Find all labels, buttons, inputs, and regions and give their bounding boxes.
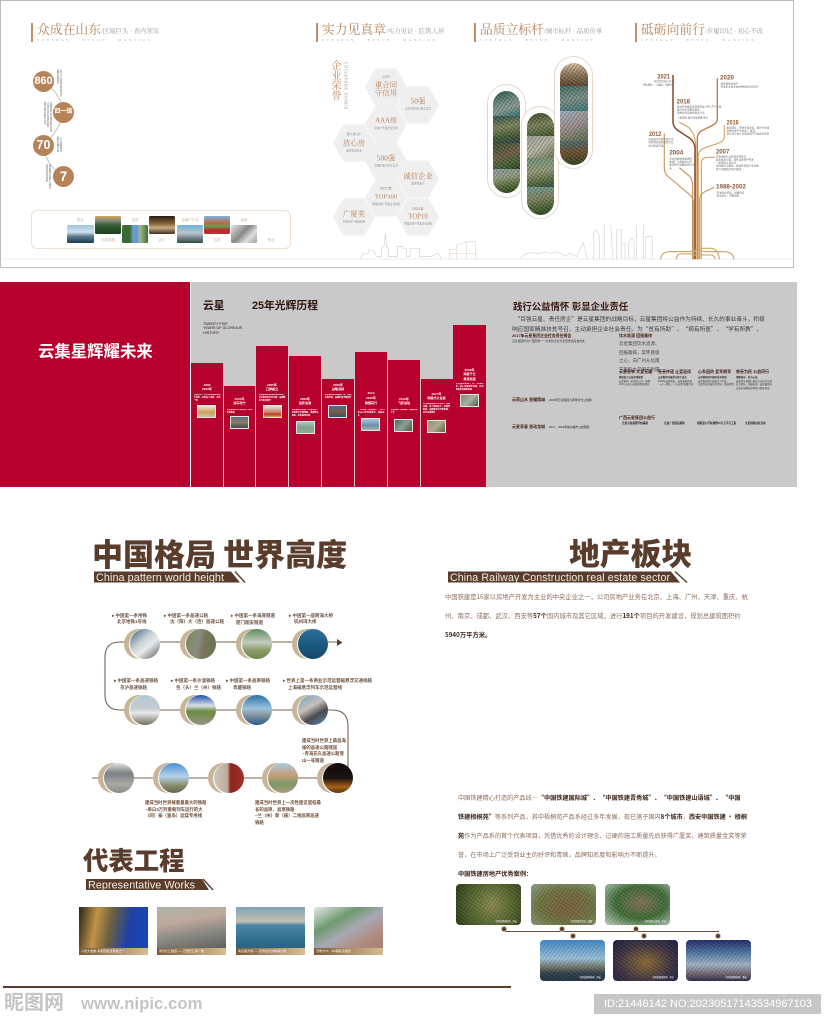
year 2007: 2007	[716, 149, 730, 156]
items: four charity columns: 集团发力公益助残献爱	[619, 376, 643, 379]
connector line	[503, 931, 719, 932]
hex: 重合同守信用: 山东省	[382, 74, 390, 78]
item: 广西云星集团公益行: 云星开发捐赠学校基建	[622, 422, 648, 425]
hex: TOP300: TOP300	[375, 194, 398, 200]
illustration: city skyline outlines	[1, 225, 793, 260]
heading: 企业荣誉: 企	[332, 61, 342, 72]
year 2018: 一级资质 服务等级优秀单位	[677, 115, 708, 119]
row 2 milestones: ▸ 世界上第一条商业示范运营磁悬浮交通线路	[283, 678, 372, 683]
column 2013-2015: 2015年	[366, 396, 376, 400]
heading: 企业荣誉: 荣	[332, 81, 342, 92]
labels: business chain: 置业	[77, 218, 83, 222]
panel: red left banner	[0, 282, 190, 487]
hex: 诚信企业: 抵押房地产	[412, 182, 425, 186]
row 2 milestones	[114, 678, 372, 725]
row 1 milestones: 北京地铁1号线	[117, 618, 147, 624]
gallery: real estate cases with connector: 中国铁建梧桐苑 · 南京	[652, 977, 674, 979]
ribbon: China Railway Construction real estate sector: China Railway Construction real estate sector	[450, 572, 670, 584]
watermark: image id	[594, 994, 821, 1014]
column 2006	[289, 356, 321, 487]
year 2016: 2016	[727, 119, 739, 126]
row 3 milestones: 山一号隧道	[302, 758, 324, 763]
items: four charity columns: 云星集团开展善行接力活动	[658, 376, 687, 379]
text block: product line intro: 誉，在市场上广泛受到业主的好评和青睐，品牌知名度和影响力不断提升。	[458, 850, 661, 859]
row 2 milestones: 包（头）兰（州）铁路	[176, 684, 221, 690]
hex: TOP10	[397, 198, 439, 236]
chart: circle stats chain: 860	[34, 75, 53, 87]
column 2004	[224, 386, 255, 487]
column 1993-2003: 云星成立，业务范围拓展至南宁市场，开发多个项目，立足广西	[194, 394, 220, 402]
heading: 砥砺向前行: /步履印记 · 初心不改	[705, 28, 763, 35]
column 2005: 口碑崛立	[266, 387, 278, 391]
year 2004: 集团资产规模达到亿元	[669, 162, 695, 166]
hex: 诚信企业: 诚信企业	[403, 172, 433, 180]
item: 云星青春	[512, 424, 590, 429]
column 2005	[256, 346, 288, 487]
items: four charity columns: 自治区捐赠抗疫物资与防疫用品	[736, 386, 769, 390]
item: 广西云星集团公益行	[619, 415, 766, 425]
heading: 品质立标杆: /城市标杆 · 品质传承	[544, 28, 602, 35]
heading: 品质立标杆: SYNERGY BEYUE MANSION	[480, 38, 595, 42]
year 2020	[720, 75, 759, 88]
row 3 milestones: 建成当时世界上一次性建设里程最	[255, 800, 321, 805]
row 1 milestones	[112, 612, 333, 659]
labels: business chain	[76, 218, 274, 242]
chart: circle stats chain: 7	[60, 168, 67, 184]
item: 云星青春: 2017、2018年柳州城市公益赛跑	[549, 425, 589, 429]
hex: TOP10: 2021年	[412, 206, 424, 211]
column 2018: 跨越千亿	[463, 372, 476, 376]
column 2018: 云星集团跨越千亿，再谱新篇，进入全国房企百强，开启高质量发展新阶段	[456, 383, 484, 391]
chart: circle stats chain: 山东十大房地产开发企业	[59, 69, 62, 96]
photo pill: middle tower of aerial images	[521, 106, 559, 219]
items: four charity columns: 100万元向公益组织提供帮扶	[619, 383, 649, 386]
item: 饮水思源	[619, 333, 660, 372]
items: four charity columns: 云星物业捐赠公益社区支持并关爱	[736, 380, 772, 382]
column 2006: 云星集团开发多个大型项目，综合实力不断增强，发展势头强劲，业务遍布全区	[292, 409, 318, 417]
heading: 众成在山东	[31, 22, 159, 42]
ribbon: China pattern world height: China pattern world height	[96, 572, 224, 584]
row 3 milestones	[98, 738, 353, 825]
row 1 milestones: ▸ 中国第一座跨海大桥	[289, 612, 333, 618]
chart: honor hexagons	[333, 68, 439, 236]
text block: real estate intro: 州、南京、成都、武汉、西安等57个国内城市及其它区域，进行191个项目的开发建设，规划总建筑面积约	[445, 611, 741, 620]
year 2016: 集团成立，开发主营业务，被评为全省	[727, 125, 770, 129]
year 2012: 成功跻身百强	[648, 144, 664, 148]
chart: circle stats chain: 企业综合实力排名前列	[46, 102, 49, 127]
row 3 milestones: 建成当时世界上最高海	[302, 738, 346, 743]
row 3 milestones: 拔的高速公路隧道	[302, 745, 337, 750]
year 2004	[669, 150, 695, 170]
labels: business chain: 市政园林	[101, 238, 115, 242]
row 3 milestones: 长的高原、高寒铁路	[255, 807, 295, 812]
heading: 代表工程: 代表工程	[83, 842, 185, 878]
items: four charity columns: 业主帮扶，积极发放，云星集团向	[736, 383, 772, 386]
bar chart: company timeline columns	[191, 325, 486, 487]
hex: 诚信企业	[397, 160, 439, 198]
photos: representative works	[79, 907, 383, 955]
labels: business chain: 运营	[214, 238, 220, 242]
hex: 放心房: 履行承诺企业	[346, 148, 362, 152]
chart: circle stats chain: 实现多元化发展	[45, 164, 48, 182]
hex: AAA级: 房地产开发企业信用	[374, 126, 398, 130]
heading: 众成在山东: /区域巨头 · 省内领军	[101, 28, 159, 35]
item: 云南山水: 2016年云星集团六周年时光公益跑	[549, 398, 592, 402]
charity paragraph: “百强云星、责任房企”是云星集团的战略目标，云星集团将公益作为持续、长久的事业奋斗，积极	[515, 314, 765, 323]
item: 2017 report: 2017年云星集团企业社会责任报告	[512, 333, 571, 338]
year 2016: 优秀房地产企业及“广厦奖”	[727, 128, 756, 132]
chart: timeline tree	[642, 74, 770, 260]
item: 广西云星集团公益行: 走进广西建设援助	[664, 422, 685, 425]
row 3 milestones: –单日3万列重载列车运行的大	[145, 807, 203, 812]
item: 广西云星集团公益行: 广西云星集团公益行	[619, 415, 655, 420]
row 1 milestones: 厦门翔安隧道	[236, 620, 263, 624]
year 2004: 集团广州发展总公司	[669, 159, 692, 163]
row 1 milestones: 杭州湾大桥	[294, 618, 316, 624]
chart: circle stats chain: 业务遍布全省七大地市	[48, 164, 51, 189]
charity paragraph	[512, 314, 765, 333]
heading: 企业荣誉: 业	[332, 71, 342, 82]
hex: 50强: 50强	[411, 96, 426, 106]
item: 饮水思源: 云星集团饮水思源、	[619, 341, 660, 346]
heading: 企业荣誉: 誉	[332, 91, 342, 102]
heading: 众成在山东: 众成在山东	[37, 22, 101, 36]
item: 2017 report	[512, 333, 585, 343]
heading: 中国格局 世界高度: 中国格局 世界高度	[92, 530, 347, 575]
chart: circle stats chain: 服务品牌企业	[56, 137, 59, 152]
item: 2017 report: 云星集团作为广西区唯一一家省外企业代表受邀出席发布会	[512, 339, 585, 343]
row 1 milestones: ▸ 中国第一条地铁	[112, 612, 147, 618]
items: four charity columns: 走进军营开展慰问活动，赠送物资	[698, 383, 734, 386]
year 2018	[677, 98, 722, 119]
photos: representative works: 青岛港大桥——世界最长的跨海大桥	[238, 949, 286, 953]
column 2017: 跨越式大发展	[427, 396, 446, 400]
column 2016	[388, 360, 420, 487]
chart: circle stats chain	[33, 68, 74, 190]
photo pill: left tower of aerial images	[487, 84, 526, 198]
hex: TOP10: 中国房地产开发企业排名	[404, 222, 433, 226]
text block: real estate intro: 中国铁建是16家以房地产开发为主业的中央企业之一，公司房地产业务在北京、上海、广州、天津、重庆、杭	[445, 592, 748, 601]
year 2007: 等大型建筑房地产集团	[716, 167, 742, 171]
item: 饮水思源: 回报桑梓，常怀感恩	[619, 350, 660, 354]
text block: real estate intro	[445, 592, 748, 639]
row 3 milestones: –兰（州）新（疆）二线高原高速	[255, 813, 319, 818]
row 3 milestones: （同）秦（皇岛）运煤专用线	[145, 813, 202, 818]
year 2018: 优秀房企及物业服务产品	[677, 110, 705, 114]
row 2 milestones: 上海磁悬浮列车示范运营线	[288, 684, 342, 690]
hex: 重合同守信用	[365, 68, 407, 106]
chart: circle stats chain: 连续荣获山东省房地产开发	[49, 102, 52, 132]
heading: 实力见真章: /实力见证 · 匠筑人居	[386, 28, 444, 35]
year 2012: 连续被评为省优秀房企	[648, 137, 674, 141]
hex: 重合同守信用: 守信用	[375, 88, 397, 98]
year 2004: 元	[669, 167, 672, 170]
gallery: real estate cases with connector: 中国铁建梧桐苑 · 重庆	[725, 977, 747, 979]
column 2013-2015: 稳健前行	[365, 401, 377, 405]
ribbon: Representative Works: Representative Works	[88, 879, 196, 891]
heading: 25 year history: TWENTY FIVE	[203, 322, 228, 326]
labels: business chain: 物业	[268, 238, 274, 242]
items: four charity columns: 云星集团慰问部队官兵家属	[698, 376, 727, 379]
column 2005: 云星集团开发项目多次获奖，树立良好的行业口碑，品牌影响力逐步提升	[258, 394, 286, 402]
year 2020: 2020	[720, 75, 734, 82]
heading: 25 year history: 云星	[203, 300, 225, 312]
hex: 广厦奖: 开发的6个项目荣获	[343, 220, 365, 224]
panel: top brochure	[0, 0, 794, 268]
hex: 广厦奖	[333, 198, 375, 236]
chart: circle stats chain: 四一级	[54, 109, 72, 115]
row 2 milestones: ▸ 中国第一条高原铁路	[226, 678, 270, 683]
column 2018: 再谱新篇	[463, 377, 476, 381]
row 3 milestones: –青海花久高速公路雪	[302, 751, 344, 756]
items: four charity columns: 善善传递 让爱延续	[658, 369, 691, 374]
heading: 25 year history: HISTORY	[203, 331, 219, 335]
column 1993-2003	[191, 363, 223, 487]
row 2 milestones: 青藏铁路	[233, 684, 251, 690]
column 2009	[322, 379, 354, 487]
heading: 企业荣誉	[332, 60, 348, 110]
column 2004: 云星集团正式进军南宁市场开发项目	[226, 409, 252, 414]
tree roots	[661, 247, 734, 259]
hex: 500强: 中国房地产综合实力	[374, 164, 398, 168]
gallery: real estate cases with connector: 中国铁建青秀城 · 成都	[570, 921, 592, 923]
row 1 milestones: ▸ 中国第一条海底隧道	[231, 612, 275, 618]
year 2004: 2004	[669, 150, 684, 157]
year 2007	[716, 149, 759, 171]
column 2018	[453, 325, 486, 487]
items: four charity columns	[619, 369, 772, 390]
gallery: real estate cases with connector: 中国铁建国际城 · 西安	[495, 921, 517, 923]
chart: circle stats chain: 省内标杆房地产企业	[43, 102, 46, 124]
labels: business chain: 房地产开发	[182, 218, 198, 222]
text block: product line intro: 铁建梧桐苑”等系列产品，其中梧桐苑产品系经过多年发展，现已落子国内8个城市，西安中国铁建 · 梧桐	[458, 812, 747, 821]
column 2006: 强势发展	[299, 401, 311, 405]
row 1 milestones: ▸ 中国第一条高速公路	[164, 612, 208, 618]
year 2021: 2021	[657, 74, 670, 81]
hex: 50强: 山东省房地产综合实力	[405, 106, 431, 110]
year 2007: 一级资质认证企业	[716, 160, 737, 164]
row 2 milestones: ▸ 中国第一条高速铁路	[114, 678, 158, 683]
hex: TOP300	[365, 180, 407, 216]
hex: AAA级	[365, 106, 407, 142]
year 2016: 荣获首次进入全国房地产百强企业排名	[727, 131, 770, 135]
divider: brown footer line	[3, 986, 511, 988]
hex: 50强	[397, 86, 439, 124]
items: four charity columns: 慈善为民 公益同行	[736, 369, 769, 374]
photos: representative works: 人民大会堂–共和国最佳建筑之一	[81, 949, 125, 953]
column 2013-2015	[355, 352, 387, 487]
item: 云星青春: 云星青春 星动龙城	[512, 424, 545, 429]
year 2020: 开发企业及全国优秀物业企业称号	[721, 84, 759, 88]
text block: product line intro: 中国铁建精心打造的产品线—“中国铁建国际城”、“中国铁建青秀城”、“中国铁建山语城”、“中国	[458, 793, 740, 802]
text block: charity and social responsibility	[512, 300, 772, 429]
text block: product line intro: 苑作为产品系的首个代表项目，凭借优秀的设计理念、过硬的施工质量先后获得广厦奖、建筑质量金奖等荣	[458, 831, 747, 840]
chart: circle stats chain: 十大优秀物业	[59, 137, 62, 152]
hex: 500强: 500强	[377, 154, 396, 162]
column 2009: 战略深耕	[332, 387, 344, 391]
row 2 milestones: ▸ 中国第一条沙漠铁路	[171, 678, 215, 683]
item: 广西云星集团公益行: 捐献爱心学校捐赠20万元学习工程	[697, 422, 736, 425]
column 2004: 进军南宁	[233, 401, 246, 405]
hex: TOP10: TOP10	[408, 214, 428, 220]
year 2021: 持续增长，与共赢，创新力	[643, 83, 673, 87]
chart: railway snake timeline	[92, 612, 372, 825]
year 2018: 2018	[677, 98, 690, 105]
hex: 500强	[365, 142, 407, 180]
column 1993-2003: 1993	[204, 382, 210, 386]
year 2007: 服务体系完善，提升品牌资产开发	[716, 157, 754, 161]
heading: 砥砺向前行: 砥砺向前行	[641, 22, 705, 36]
year 2021: 党的领导核心作用，	[654, 79, 677, 83]
column 2009: 云星集团战略深耕广西，持续开拓市场，品牌价值不断提升	[324, 394, 352, 399]
panel: business chain strip	[31, 210, 291, 249]
heading: 25 year history	[203, 300, 318, 335]
items: four charity columns: 云星集团（桂林分公司）捐赠	[619, 380, 650, 382]
items: four charity columns: 捐赠救灾，助力公益	[736, 376, 758, 379]
year 2007: 成为集住宅建筑，建设开发及产业主体	[716, 163, 759, 167]
year 2012	[648, 131, 674, 148]
items: four charity columns: 2018年云星物业，云星集团开展	[658, 380, 692, 382]
row 2 milestones: 京沪高速铁路	[120, 684, 147, 690]
year 2020: 荣获优秀房地产	[721, 81, 739, 85]
heading: 地产板块: 地产板块	[569, 529, 692, 574]
hex: 放心房: 放心房	[343, 138, 365, 148]
photos: representative works: 济南穴T1、PD钢轨高速道	[316, 949, 351, 953]
heading: 实力见真章: SYNERGY BEYUE MANSION	[322, 38, 437, 42]
labels: business chain: 监理	[241, 218, 247, 222]
items: four charity columns: 心系国防 爱军拥军	[698, 369, 731, 374]
chart: circle stats chain: 品牌价值排名	[56, 69, 59, 84]
column 2005: 2005年	[267, 382, 277, 386]
column 2009: 2009年	[333, 382, 343, 386]
column 2016: 2016年	[399, 396, 409, 400]
watermark: nipic: www.nipic.com	[81, 994, 203, 1013]
hex: 放心房	[333, 124, 375, 162]
column 2018: 2018年	[464, 368, 474, 372]
gallery: real estate cases with connector: 中国铁建山语城 · 青岛	[644, 921, 666, 923]
column 2006: 2006年	[300, 396, 310, 400]
heading: 砥砺向前行: SYNERGY BEYUE MANSION	[641, 38, 756, 42]
heading: 企业荣誉: ENTERPRISE HONOR	[343, 62, 348, 110]
photo pill: right tower of aerial images	[554, 56, 593, 169]
items: four charity columns: 云星集团慰问退役军人代表，	[698, 380, 729, 382]
photos: representative works: 南京长江隧道——万里长江第一隧	[159, 949, 204, 953]
column 2017: 云星集团跨越式大发展，布局全国，多个项目开工，业绩创新高，品牌影响力不断增强，实力显著提升	[423, 403, 450, 414]
year 2021	[643, 74, 677, 87]
gallery: real estate cases with connector: 中国铁建梧桐苑 · 西安	[579, 977, 601, 979]
item: 饮水思源: 方医科大学第五附属	[619, 366, 660, 372]
column 2013-2015: 广泛布局，稳健前行，2013至2015年持续增长，布局全区	[358, 408, 384, 417]
column 2016: 云星集团飞跃进取，规模持续扩大	[390, 409, 418, 414]
heading: 实力见真章: 实力见真章	[322, 22, 386, 36]
hex: 重合同守信用: 重合同	[375, 80, 397, 90]
item: 广西云星集团公益行: 大爱捐款扶贫活动	[745, 422, 766, 425]
year 2007: 开发优质产品获得荣誉称号	[716, 155, 747, 159]
column 1993-2003: 2003年	[202, 387, 212, 391]
text block: product line intro	[458, 793, 747, 878]
items: four charity columns: “一对一帮扶，八方支援”捐赠活动	[658, 383, 693, 386]
year 2018: 建立开发建设及资质等级 ABC 开户主体	[677, 104, 722, 108]
row 1 milestones: 沈（阳）大（连）高速公路	[170, 618, 224, 624]
watermark: nipic: 昵图网	[4, 992, 64, 1014]
year 1988-2002: 开发起步阶段，城建项目	[717, 190, 745, 194]
items: four charity columns: 云星善举 大爱无疆	[619, 369, 652, 374]
heading: 25 year history: 25年光辉历程	[252, 300, 318, 312]
heading: 25 year history: YEARS OF GLORIOUS	[203, 326, 242, 330]
banner slogan: 云集星辉耀未来	[38, 342, 153, 360]
watermark: nipic	[4, 992, 203, 1014]
item: 云南山水: 云南山水 星耀情城	[512, 397, 545, 402]
heading: 砥砺向前行	[635, 22, 763, 42]
year 2018: 被评为全市物业服务	[677, 107, 700, 111]
year 2012: 荣获物业服务优秀企业	[648, 140, 674, 144]
tree branches	[664, 75, 724, 259]
charity heading: 践行公益情怀 彰显企业责任	[513, 300, 628, 312]
heading: 众成在山东: SYNERGY BEYUE MANSION	[37, 38, 152, 42]
heading: 品质立标杆: 品质立标杆	[480, 22, 544, 36]
column 2017	[420, 379, 452, 487]
column 2016: 飞跃进取	[398, 401, 410, 405]
panel: gray history and charity section	[191, 282, 797, 487]
photos: business chain images	[67, 216, 257, 243]
year 1988-2002: 1988-2002	[716, 184, 746, 191]
watermark: image id: ID:21446142 NO:20230517143534967103	[604, 998, 812, 1010]
text block: product line intro: 中国铁建房地产优秀案例：	[458, 869, 532, 878]
column 2004: 2004年	[234, 396, 244, 400]
chart: circle stats chain: 70	[37, 138, 50, 152]
labels: business chain: 投资	[132, 218, 138, 222]
row 3 milestones: 建成当时世界载重量最大的铁路	[145, 800, 206, 805]
item: 饮水思源: 饮水思源 回报桑梓	[619, 333, 652, 338]
column 2013-2015: 2013	[368, 391, 374, 395]
item: 饮水思源: 之心，向广州从化南	[619, 358, 660, 363]
hex: TOP300: 中国房地产开发企业排名	[372, 202, 401, 206]
column 2017: 2017年	[432, 392, 441, 396]
year 1988-2002	[716, 184, 746, 198]
hex: 广厦奖: 广厦奖	[343, 210, 366, 218]
year 1988-2002: 物业成立，积累经验	[717, 194, 740, 198]
heading: 品质立标杆	[474, 22, 602, 42]
hex: AAA级: AAA级	[375, 116, 397, 124]
year 2012: 2012	[649, 131, 662, 138]
text block: real estate intro: 5940万平方米。	[445, 630, 491, 639]
row 3 milestones: 铁路	[255, 820, 264, 825]
labels: business chain: 设计	[159, 238, 165, 242]
charity paragraph: 响应国家精准扶贫号召，主动承担企业社会责任。为“贫有所助”、“病有所医”、“学有所教”、	[512, 324, 762, 333]
year 2004: 企业跨越式发展进程	[669, 156, 692, 160]
item: 云南山水	[512, 397, 592, 402]
heading: 实力见真章	[316, 22, 444, 42]
hex: TOP300: 2021年	[380, 186, 392, 190]
hex: 放心房: 群性“放心房”	[347, 132, 361, 136]
gallery: real estate cases with connector	[456, 884, 751, 981]
year 2016	[727, 119, 770, 135]
